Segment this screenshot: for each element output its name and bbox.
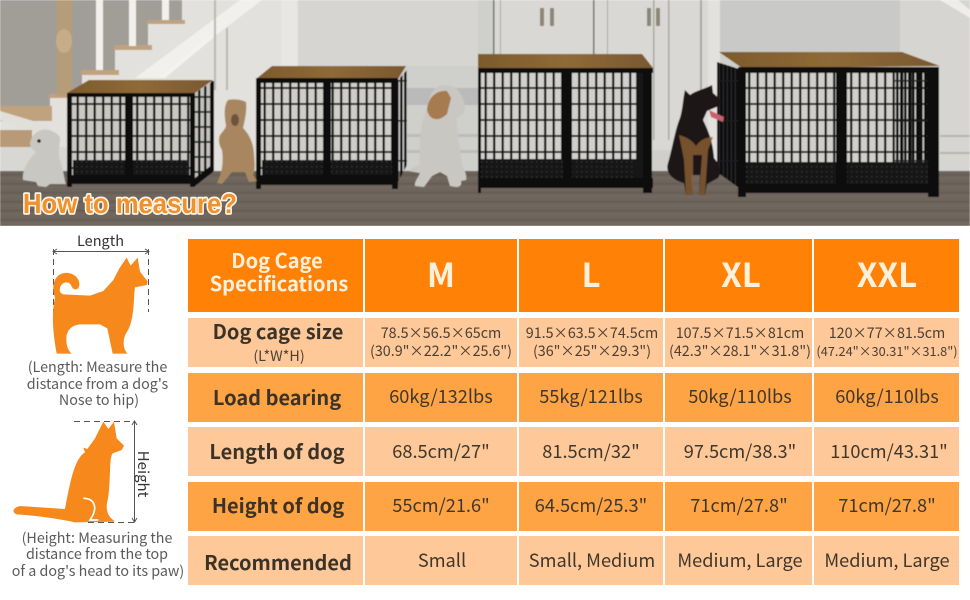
table row: load bearing: 50kg/110lbs [688, 383, 792, 409]
table row: height of dog [188, 482, 959, 531]
table row: load bearing: 60kg/110lbs [835, 383, 939, 409]
arrow: length dimension [53, 249, 149, 320]
table row: dog cage size: 91.5×63.5×74.5cm [526, 322, 658, 343]
table header row: XL [721, 249, 761, 297]
table row: recommended: Medium, Large [677, 547, 803, 573]
table header row [188, 239, 959, 312]
table row: dog cage size: 120×77×81.5cm [829, 322, 945, 343]
arrow: height dimension [74, 421, 137, 522]
table row: dog cage size: (42.3"×28.1"×31.8") [669, 340, 811, 361]
panel: height measuring guide [12, 421, 184, 581]
table row: dog cage size: (30.9"×22.2"×25.6") [370, 340, 512, 361]
dog: black and tan [667, 85, 724, 195]
table row: length of dog: 110cm/43.31" [830, 438, 948, 464]
table row: length of dog: 97.5cm/38.3" [684, 438, 796, 464]
cage XL [478, 54, 653, 193]
text: length note: Nose to hip) [59, 389, 139, 410]
table row: dog cage size: (47.24"×30.31"×31.8") [816, 341, 958, 360]
table row: length of dog [188, 427, 959, 476]
table row: load bearing [188, 373, 959, 422]
table row: dog cage size: 78.5×56.5×65cm [381, 322, 501, 343]
cage XXL [717, 52, 940, 197]
white cabinets [478, 0, 970, 172]
table header row: M [427, 249, 455, 297]
icon: standing dog silhouette [53, 258, 148, 354]
table header row: XXL [857, 249, 917, 297]
table row: recommended: Medium, Large [824, 547, 950, 573]
text: length note: distance from a dog's [27, 373, 169, 394]
table header row: Dog Cage [231, 245, 323, 274]
table row: height of dog: Height of dog [212, 490, 344, 519]
text: height note: (Height: Measuring the [22, 527, 172, 548]
table row: length of dog: Length of dog [209, 436, 345, 465]
table row: recommended [188, 536, 959, 585]
icon: sitting dog silhouette [13, 422, 124, 522]
table row: load bearing: 55kg/121lbs [539, 383, 643, 409]
table row: dog cage size: 107.5×71.5×81cm [676, 322, 804, 343]
table row: height of dog: 64.5cm/25.3" [535, 492, 647, 518]
panel: room photo with cages and dogs [0, 0, 970, 226]
left grey wall [0, 0, 215, 106]
panel: specifications table [188, 239, 959, 585]
text: length note: (Length: Measure the [28, 356, 167, 377]
table row: dog cage size: (36"×25"×29.3") [533, 340, 651, 361]
table row: dog cage size [188, 316, 959, 367]
dog: white small [23, 130, 66, 187]
table row: recommended: Small [418, 547, 466, 573]
dog: tan shar-pei [217, 99, 257, 184]
staircase and white wall panelling [0, 0, 720, 172]
wood floor [0, 171, 970, 226]
table row: length of dog: 81.5cm/32" [542, 438, 640, 464]
label: height: Height [133, 451, 154, 498]
cage L [256, 66, 407, 189]
table row: length of dog: 68.5cm/27" [392, 438, 490, 464]
dog: white spaniel [408, 85, 466, 187]
table row: recommended: Small, Medium [529, 547, 655, 573]
table row: height of dog: 71cm/27.8" [838, 492, 936, 518]
text: height note: distance from the top [26, 543, 168, 564]
heading: how to measure: How to measure? [23, 188, 237, 219]
table row: height of dog: 71cm/27.8" [690, 492, 788, 518]
table row: load bearing: 60kg/132lbs [389, 383, 493, 409]
text: height note: of a dog's head to its paw) [12, 560, 184, 581]
cage M [67, 80, 214, 187]
table header row: L [581, 249, 601, 297]
table row: recommended: Recommended [204, 547, 352, 576]
label: length: Length [77, 230, 124, 251]
panel: length measuring guide [27, 230, 169, 410]
table row: dog cage size: Dog cage size [213, 316, 343, 345]
baluster posts [56, 0, 169, 96]
table header row: Specifications [210, 268, 348, 297]
table row: load bearing: Load bearing [213, 382, 341, 411]
table row: dog cage size: (L*W*H) [253, 345, 305, 366]
table row: height of dog: 55cm/21.6" [392, 492, 490, 518]
